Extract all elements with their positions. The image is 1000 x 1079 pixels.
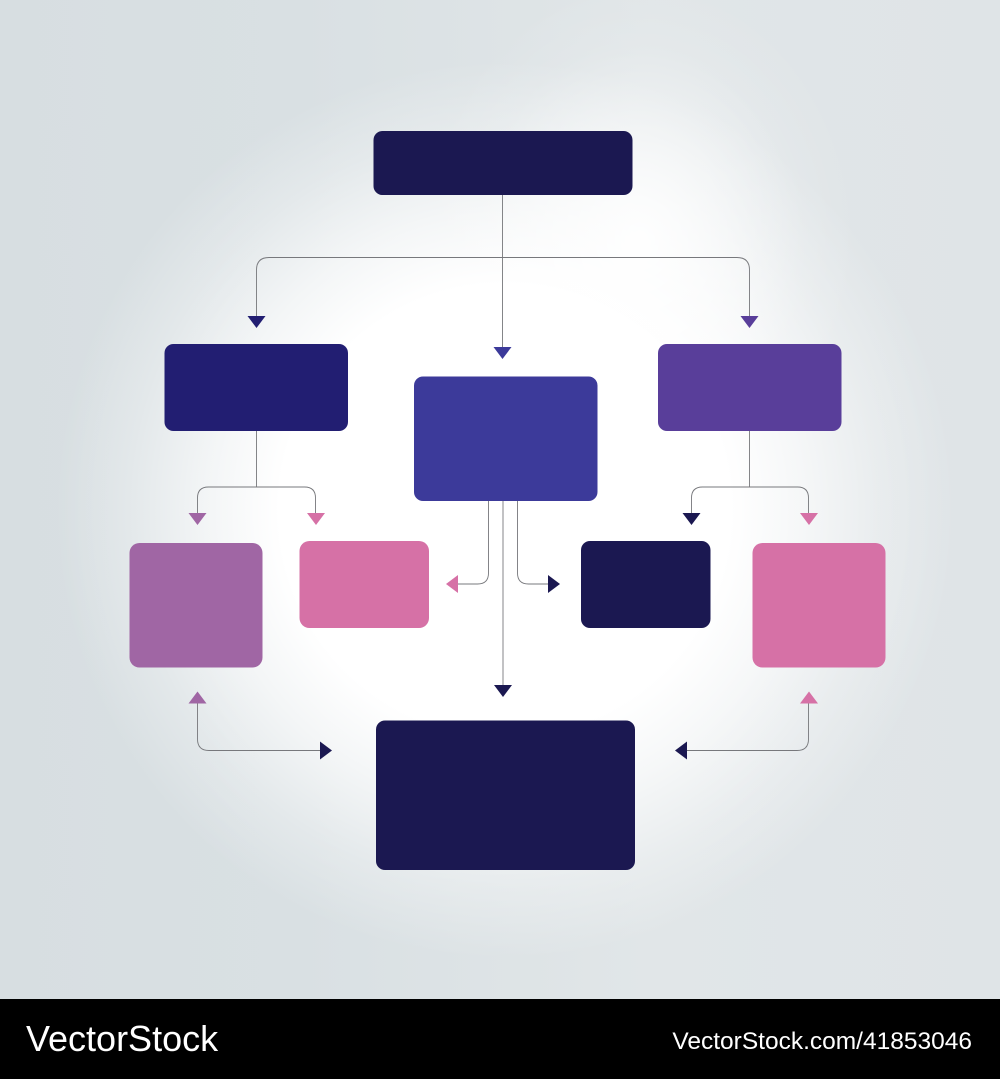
arrow: up to far right box <box>800 692 818 704</box>
connector: left branch <box>198 431 316 514</box>
arrow: center left pink <box>446 575 458 593</box>
box: center second level <box>414 376 598 501</box>
arrow: to inner left box <box>307 513 325 525</box>
arrow: center down <box>494 685 512 697</box>
connector: bottom left loop <box>198 703 321 750</box>
box: inner right navy <box>581 541 710 628</box>
footer bar <box>0 999 1000 1079</box>
arrow: to left box <box>248 316 266 328</box>
arrow: to far right box <box>800 513 818 525</box>
box: left second level <box>164 344 348 431</box>
footer logo text: VectorStock <box>26 1018 218 1059</box>
arrow: to far left box <box>188 513 206 525</box>
connector: right branch <box>692 431 808 514</box>
arrow: right into bottom box <box>320 742 332 760</box>
arrow: up to far left box <box>188 692 206 704</box>
connector: bottom right loop <box>686 703 808 750</box>
box: far left purple <box>130 543 262 668</box>
arrow: center right navy <box>548 575 560 593</box>
arrow: to center box <box>494 347 512 359</box>
box: bottom result <box>376 720 635 870</box>
box: far right pink <box>752 543 886 668</box>
arrow: left into bottom box <box>675 742 687 760</box>
connector: center branches <box>457 501 549 686</box>
arrow: to right box <box>740 316 758 328</box>
connector: root to second level <box>256 195 750 348</box>
box: top root <box>374 131 632 195</box>
box: inner left pink <box>300 541 429 628</box>
arrow: to inner right box <box>682 513 700 525</box>
footer image id: VectorStock.com/41853046 <box>672 1028 972 1055</box>
box: right second level <box>658 344 842 431</box>
